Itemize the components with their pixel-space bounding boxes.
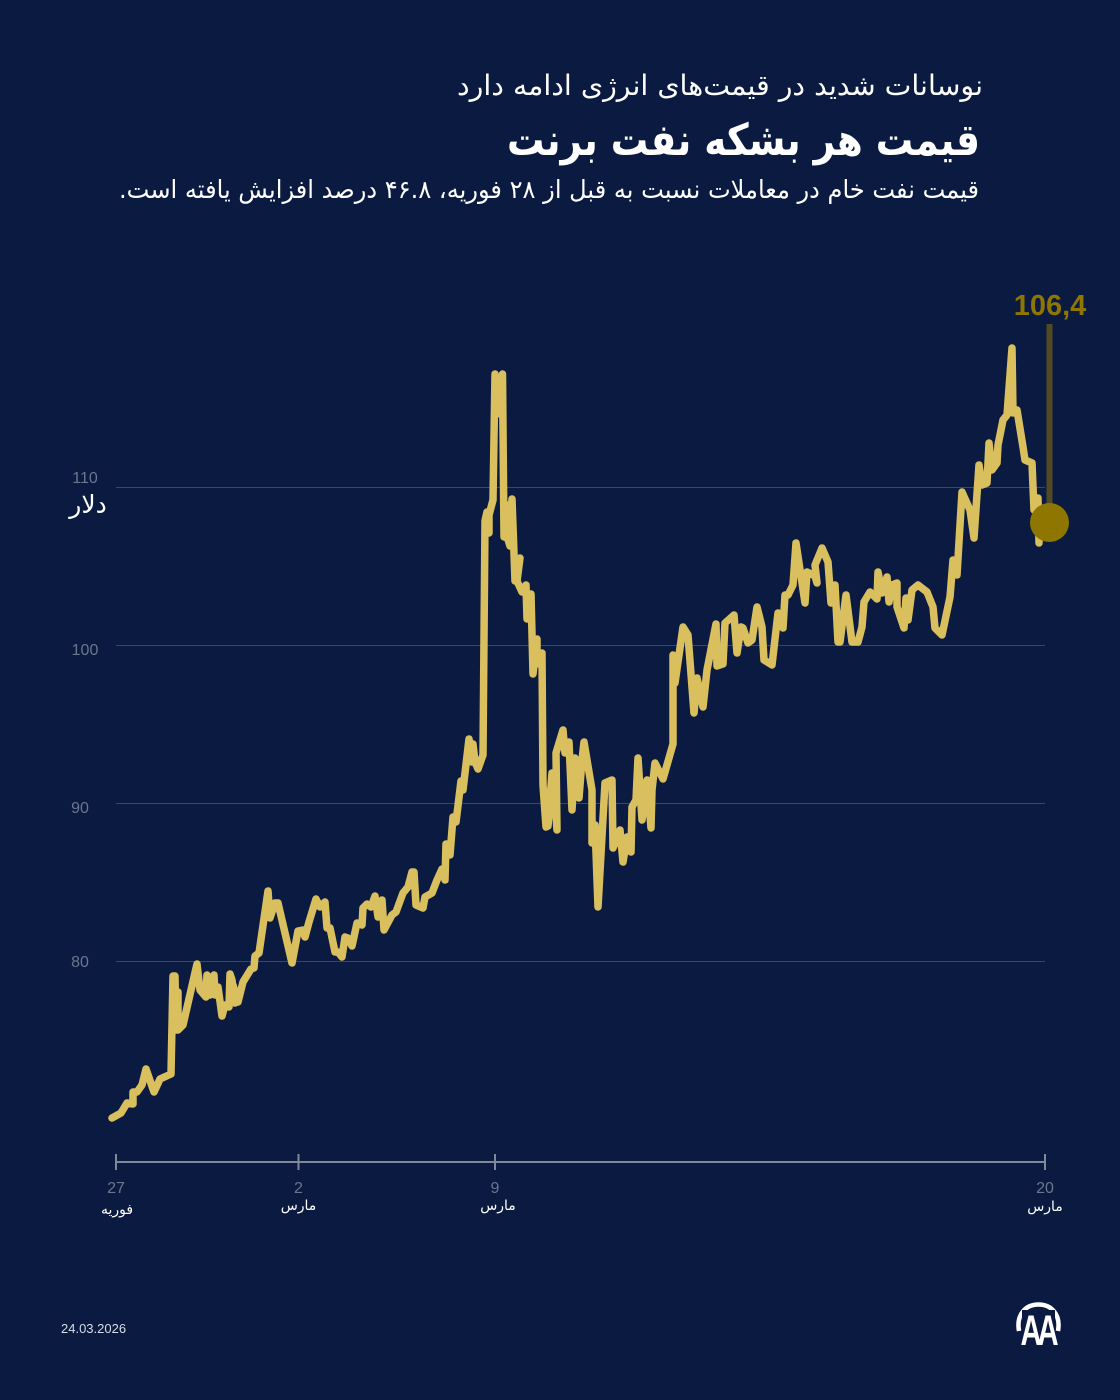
callout: latest value (1014, 290, 1086, 542)
y label 100: 100 (72, 642, 98, 659)
logo: AA (1020, 1306, 1058, 1354)
x label 27: 27 (107, 1180, 125, 1197)
y unit: دلار (67, 490, 107, 519)
x label 20: 20 (1036, 1180, 1054, 1197)
y label 80: 80 (71, 954, 89, 971)
y label 90: 90 (71, 800, 89, 817)
x axis (101, 1154, 1063, 1218)
title: قیمت هر بشکه نفت برنت (507, 115, 980, 166)
x label month: فوریه (101, 1202, 133, 1218)
x label month: مارس (1027, 1199, 1063, 1215)
x label 9: 9 (491, 1180, 500, 1197)
value label: 106,4 (1014, 290, 1086, 322)
date: 24.03.2026 (61, 1321, 126, 1336)
y label 110: 110 (72, 470, 98, 487)
x label 2: 2 (294, 1180, 303, 1197)
y axis grid and labels (67, 470, 1045, 971)
line chart: Brent price (112, 348, 1039, 1118)
x label month: مارس (480, 1198, 516, 1214)
header block (119, 69, 983, 204)
subtitle: قیمت نفت خام در معاملات نسبت به قبل از ۲۸ فوریه، ۴۶.۸ درصد افزایش یافته است. (119, 175, 979, 204)
kicker line: نوسانات شدید در قیمت‌های انرژی ادامه دارد (457, 69, 983, 102)
x label month: مارس (281, 1198, 316, 1214)
